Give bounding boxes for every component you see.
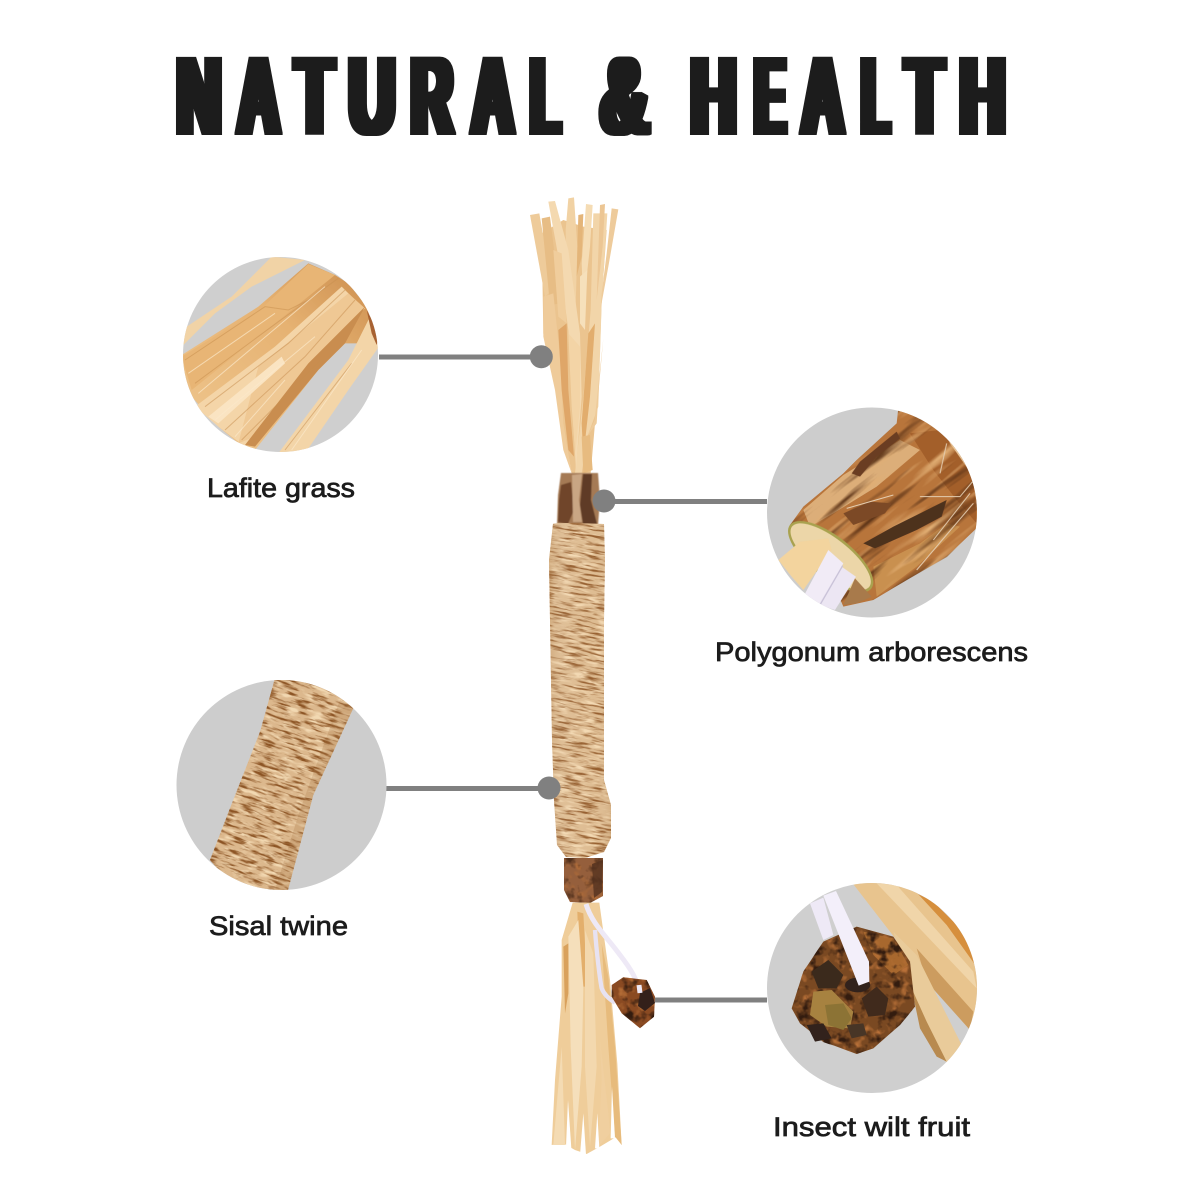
connector: Insect wilt fruit (655, 998, 767, 1002)
title: N (177, 35, 221, 158)
title: A (802, 35, 843, 158)
label: Polygonum arborescens: Polygonum arborescens (715, 637, 1028, 667)
title: E (755, 35, 785, 158)
label: Sisal twine: Sisal twine (209, 911, 348, 941)
label: Insect wilt fruit: Insect wilt fruit (773, 1112, 971, 1142)
bark texture (790, 410, 977, 602)
top bark segment (557, 473, 600, 525)
fruit texture (793, 927, 913, 1054)
connector: Lafite grass (379, 345, 553, 368)
small insect wilt fruit (612, 977, 656, 1028)
title: L (531, 35, 559, 158)
panel: Insect wilt fruit close-up (765, 880, 980, 1095)
title: L (862, 35, 889, 158)
title: T (906, 35, 943, 158)
connector: Sisal twine (386, 776, 560, 800)
title: & (600, 35, 649, 158)
bottom raffia grass tassel (552, 903, 622, 1155)
white elastic cord (586, 904, 639, 1003)
connector: Polygonum arborescens (592, 490, 767, 512)
title: H (960, 35, 1005, 158)
panel: Lafite grass close-up (180, 254, 382, 456)
top raffia grass tassel (530, 197, 618, 473)
title: T (296, 35, 333, 158)
sisal twine body (549, 523, 611, 858)
product: catnip stick toy (530, 197, 656, 1154)
panel: Polygonum arborescens close-up (767, 408, 977, 618)
title: A (472, 35, 513, 158)
title: U (349, 35, 395, 158)
label: Lafite grass: Lafite grass (207, 473, 355, 503)
title: H (691, 35, 736, 158)
panel: Sisal twine close-up (176, 680, 386, 890)
bottom bark segment (564, 858, 603, 903)
title: A (238, 35, 279, 158)
title: R (411, 35, 452, 158)
